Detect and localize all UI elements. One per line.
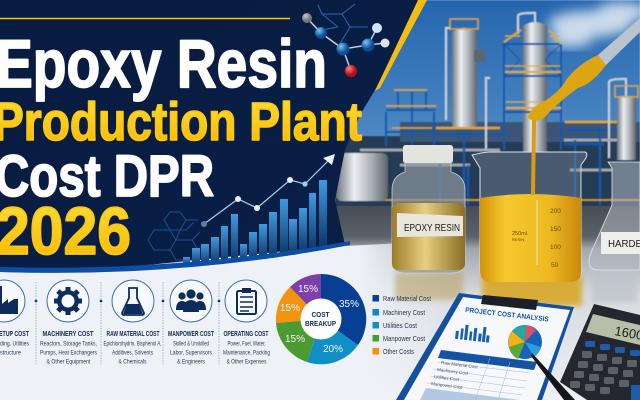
text: raw material details: Epichlorohydrin, Bisphenol A, xyxy=(104,342,162,348)
table surface xyxy=(330,206,640,400)
bar chart with trend line xyxy=(183,154,335,265)
icon: people xyxy=(170,280,212,322)
flask label xyxy=(601,232,640,254)
calculator body xyxy=(560,304,640,400)
text: machinery details: Pumps, Heat Exchangers xyxy=(40,350,97,356)
resin stream xyxy=(531,118,536,195)
legend swatches xyxy=(372,295,379,354)
text: operating details: & Other Expenses xyxy=(226,360,266,366)
legend labels: Manpower Cost xyxy=(383,334,426,343)
text: setup details: ding, Utilities xyxy=(0,342,29,348)
reflections on table xyxy=(395,268,637,306)
icon: gear xyxy=(47,280,89,322)
item: setup cost xyxy=(0,280,29,356)
text: manpower details: & Engineers xyxy=(177,360,205,366)
clipboard board xyxy=(396,293,574,400)
bonds xyxy=(318,4,368,47)
clouds xyxy=(548,2,640,47)
lower frame xyxy=(440,130,600,205)
segment 35% xyxy=(321,274,366,345)
beaker scale: 200 xyxy=(550,208,561,215)
mini pie chart xyxy=(508,325,542,359)
text: setup details xyxy=(0,342,29,356)
calculator xyxy=(560,304,640,400)
title line 1: Epoxy Resin xyxy=(0,26,327,102)
yellow walkways xyxy=(436,122,620,128)
blue frame left xyxy=(386,92,436,146)
donut chart: cost breakup xyxy=(276,274,366,364)
hexagon network decoration xyxy=(148,212,200,260)
text: machinery details xyxy=(40,342,97,366)
trend points xyxy=(201,177,308,227)
text: operating details xyxy=(223,342,270,366)
bars xyxy=(183,180,327,265)
clipboard: project cost analysis xyxy=(396,293,575,400)
donut labels: 35% xyxy=(339,299,359,310)
heading: setup cost: ETUP COST xyxy=(0,329,29,338)
title line 2: Production Plant xyxy=(0,92,362,152)
legend labels: Utilities Cost xyxy=(383,321,418,330)
text: raw material details: Additives, Solvents xyxy=(112,350,153,356)
glass dropper xyxy=(528,18,640,121)
calculator display xyxy=(586,314,640,345)
beaker scale: 50 xyxy=(551,262,559,269)
title xyxy=(0,26,362,269)
bottom light panel xyxy=(0,240,460,400)
text: operating details: Power, Fuel, Water, xyxy=(228,342,266,348)
item: machinery cost xyxy=(40,280,97,366)
donut centre label: BREAKUP xyxy=(305,319,336,328)
clipboard clip xyxy=(481,295,538,310)
heading: manpower cost: MANPOWER COST xyxy=(168,329,214,338)
text: manpower details: Skilled & Unskilled xyxy=(173,342,209,348)
item: manpower cost xyxy=(168,280,214,366)
navy title panel xyxy=(0,0,420,280)
item: operating cost xyxy=(223,280,270,366)
cost table: Utilities Cost xyxy=(434,374,460,382)
cost table: Raw Material Cost xyxy=(441,360,479,370)
cost table: Manpower Cost xyxy=(431,381,464,390)
donut labels xyxy=(280,284,359,355)
text: operating details: Maintenance, Packing xyxy=(223,350,270,356)
tower left xyxy=(452,28,477,128)
legend xyxy=(372,294,432,356)
icon: flask xyxy=(112,280,154,322)
cost table: Machinery Cost xyxy=(437,367,469,376)
flask: hardener xyxy=(589,162,640,270)
segment 15% purple xyxy=(290,274,321,319)
donut labels: 15% xyxy=(280,303,300,314)
heading: raw material cost: RAW MATERIAL COST xyxy=(106,329,160,338)
beaker scale: RESIN xyxy=(512,237,524,242)
blue frame centre xyxy=(504,44,561,150)
yellow diagonal stripe xyxy=(375,0,427,91)
text: manpower details: Labor, Supervisors xyxy=(170,350,212,356)
sky xyxy=(330,0,640,215)
legend labels xyxy=(383,294,432,356)
legend labels: Machinery Cost xyxy=(383,308,426,317)
donut labels: 15% xyxy=(285,334,305,345)
text: manpower details xyxy=(170,342,212,366)
molecule graphic xyxy=(302,4,390,77)
item: raw material cost xyxy=(104,280,162,366)
clipboard paper xyxy=(404,297,570,400)
trend arrowhead xyxy=(323,154,335,165)
plant structures xyxy=(335,13,640,212)
icon: checklist xyxy=(225,280,267,322)
yellow rule xyxy=(0,18,290,20)
legend labels: Raw Material Cost xyxy=(383,294,432,303)
photo: chemical plant background xyxy=(330,0,640,215)
text: raw material details: & Chemicals xyxy=(118,360,146,366)
segment 15% green xyxy=(276,319,321,362)
beaker scale: 250ml xyxy=(512,231,527,237)
text: setup details: structure xyxy=(0,350,22,356)
bottle: epoxy resin xyxy=(392,145,465,273)
beaker scale: 150 xyxy=(550,226,561,233)
tower centre xyxy=(523,22,547,152)
atoms xyxy=(302,13,312,23)
donut centre xyxy=(300,298,342,340)
beaker scale: 100 xyxy=(550,244,561,251)
bottle cap xyxy=(403,145,453,163)
donut labels: 15% xyxy=(298,284,318,295)
bottle label: EPOXY RESIN xyxy=(404,222,460,234)
text: machinery details: & Other Equipment xyxy=(46,360,91,366)
donut centre label: COST xyxy=(312,310,330,319)
donut labels: 20% xyxy=(323,344,343,355)
donut centre label xyxy=(305,310,336,328)
blue curved band xyxy=(0,241,350,273)
text: machinery details: Reactors, Storage Tanks, xyxy=(40,342,97,348)
beaker with resin xyxy=(472,152,587,282)
trend line xyxy=(204,157,332,224)
heading: machinery cost: MACHINERY COST xyxy=(42,329,94,338)
tower right xyxy=(617,96,636,160)
title line 3: Cost DPR xyxy=(0,144,214,209)
segment 20% xyxy=(307,319,358,364)
pen xyxy=(531,353,575,400)
cost table xyxy=(420,350,537,400)
title line 4: 2026 xyxy=(0,194,131,269)
glassware group xyxy=(392,18,640,306)
legend labels: Other Costs xyxy=(383,347,414,356)
segment 15% orange xyxy=(276,287,321,323)
calculator keys xyxy=(570,341,640,400)
storage tank xyxy=(336,153,388,201)
heading: operating cost: OPERATING COST xyxy=(224,329,269,338)
cost category row xyxy=(0,280,270,366)
text: raw material details xyxy=(104,342,162,366)
beaker scale xyxy=(512,208,561,269)
clipboard heading: PROJECT COST ANALYSIS xyxy=(465,307,549,324)
dividers xyxy=(36,282,219,364)
pipes xyxy=(446,28,626,158)
mini bar chart xyxy=(455,324,490,343)
icon: factory xyxy=(0,280,25,322)
